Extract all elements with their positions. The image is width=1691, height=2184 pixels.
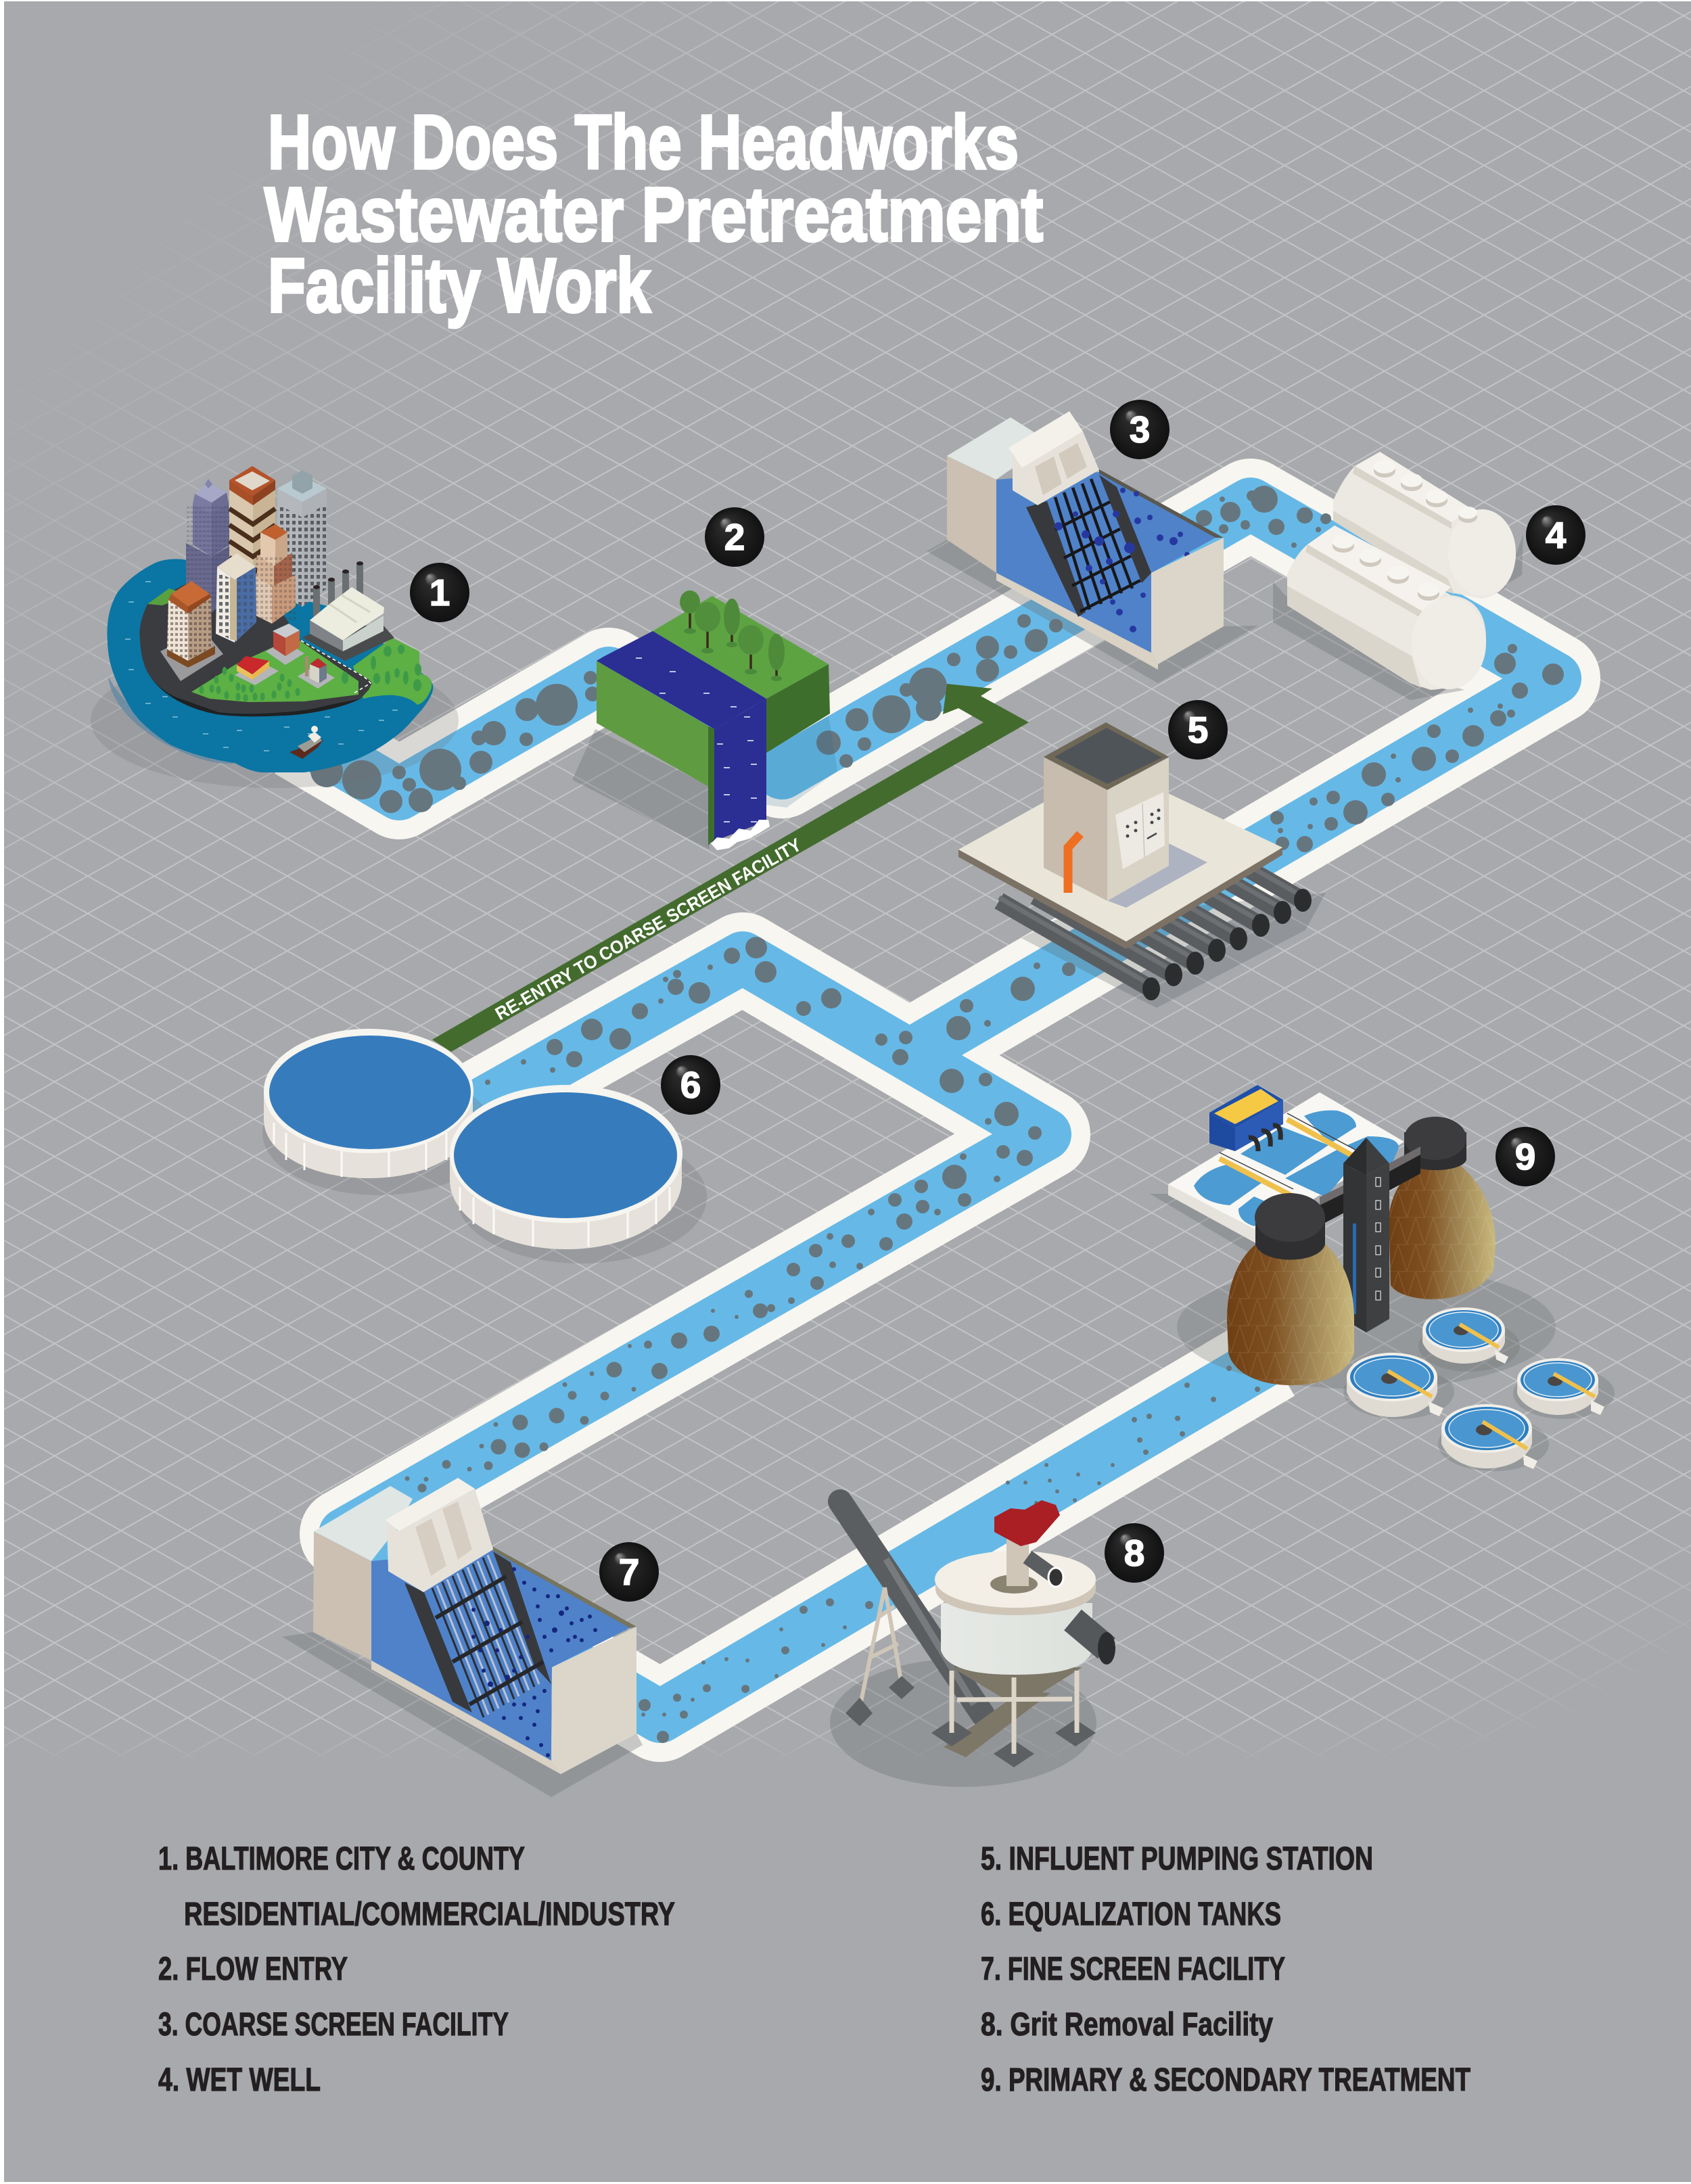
ground shadow bbox=[1177, 1265, 1556, 1389]
river surface bbox=[597, 631, 766, 729]
top-left land patch bbox=[147, 588, 189, 605]
right face bbox=[766, 664, 830, 753]
trees on the bank bbox=[680, 590, 785, 681]
lawn bbox=[191, 641, 358, 702]
right wall bbox=[1151, 538, 1224, 664]
catwalks bbox=[1320, 1146, 1420, 1226]
conveyor bbox=[840, 1502, 983, 1715]
hopper cone bbox=[952, 1667, 1082, 1701]
road bbox=[139, 575, 372, 714]
tank two rim bbox=[450, 1085, 682, 1223]
channel shadow bbox=[766, 716, 837, 808]
back digester dome bbox=[1389, 1117, 1496, 1299]
basin plate bbox=[1168, 1092, 1404, 1232]
purple tower bbox=[186, 479, 235, 612]
striped tower bbox=[229, 466, 275, 582]
legend: right column: 5. INFLUENT PUMPING STATION bbox=[981, 1841, 1373, 1877]
number badge 4: 4 bbox=[1546, 514, 1567, 556]
screen bars bbox=[1055, 479, 1140, 611]
legend: left column: 3. COARSE SCREEN FACILITY bbox=[158, 2007, 509, 2043]
clarifier two bbox=[1343, 1353, 1454, 1419]
tank one shadow bbox=[262, 1071, 495, 1195]
number badge 6 bbox=[661, 1055, 720, 1115]
harbour water bbox=[107, 559, 433, 772]
tower left face bbox=[1044, 758, 1107, 901]
legend: left column: 2. FLOW ENTRY bbox=[158, 1951, 348, 1987]
platform edge bbox=[958, 847, 1282, 949]
tower roof bbox=[1044, 722, 1169, 790]
road dark lower edge bbox=[149, 674, 361, 716]
number badge 9: 9 bbox=[1515, 1136, 1535, 1178]
left wall bbox=[313, 1531, 371, 1660]
platform top bbox=[958, 766, 1282, 942]
front bottom ledge bbox=[371, 1660, 561, 1774]
panel: wet well tanks (4) bbox=[1273, 452, 1523, 700]
stem base ring bbox=[990, 1575, 1038, 1594]
panel: primary and secondary treatment (9) bbox=[1150, 1085, 1615, 1471]
number badge 5 bbox=[1168, 700, 1228, 760]
silo body bbox=[941, 1603, 1092, 1675]
foam bbox=[711, 820, 770, 850]
gate housing bbox=[386, 1478, 493, 1592]
tank two water bbox=[454, 1092, 677, 1218]
left wall bbox=[947, 456, 996, 573]
dashed road line bbox=[301, 641, 371, 693]
debris dots bbox=[471, 1567, 597, 1757]
yellow bridges bbox=[1220, 1113, 1356, 1196]
legend: left column: 4. WET WELL bbox=[158, 2062, 321, 2098]
front bottom ledge bbox=[996, 573, 1158, 670]
red valve bbox=[994, 1500, 1060, 1546]
pipe mouth bbox=[1048, 1568, 1063, 1587]
panel: coarse screen facility (3) bbox=[927, 411, 1258, 683]
number badge 7 bbox=[599, 1542, 659, 1602]
pipe openings bbox=[1142, 889, 1312, 1000]
basin plate edge bbox=[1168, 1184, 1261, 1246]
arrow: re-entry green return line bbox=[432, 684, 1029, 1052]
number badge 6: 6 bbox=[680, 1064, 701, 1106]
waterfall bbox=[708, 699, 766, 843]
ladder stand bbox=[846, 1587, 914, 1726]
tank two shadow bbox=[457, 1131, 707, 1263]
front tank bbox=[1287, 526, 1486, 690]
tank one rim bbox=[264, 1029, 473, 1153]
sludge particles in channel bbox=[310, 486, 1564, 1743]
tower right face bbox=[1107, 758, 1169, 901]
basins bbox=[1194, 1111, 1399, 1226]
orange pipe bbox=[1068, 834, 1080, 893]
panel: city (1) bbox=[91, 466, 459, 788]
screen frame bbox=[1026, 475, 1151, 617]
stem bbox=[1006, 1539, 1029, 1586]
brick tower bbox=[167, 581, 215, 668]
intake pipes bbox=[999, 847, 1303, 989]
back rim bbox=[1099, 469, 1224, 538]
number badge 9 bbox=[1496, 1127, 1555, 1186]
houses bbox=[235, 624, 335, 689]
discharge pipe bbox=[1073, 1620, 1107, 1648]
grey tower bbox=[277, 470, 327, 607]
legend: left column: 1. BALTIMORE CITY & COUNTY bbox=[158, 1841, 525, 1877]
tank one water bbox=[269, 1036, 471, 1149]
number badge 2 bbox=[705, 507, 764, 567]
orange tower bbox=[256, 524, 296, 624]
front digester dome bbox=[1227, 1193, 1354, 1385]
clarifier four bbox=[1438, 1404, 1549, 1471]
floor shadow bbox=[1108, 843, 1207, 908]
control panel bbox=[1115, 792, 1165, 869]
top slab bbox=[314, 1486, 413, 1561]
water ripples bbox=[125, 582, 398, 751]
clarifier three bbox=[1513, 1358, 1615, 1419]
legend: left column bbox=[158, 1841, 675, 2098]
water under-layer bbox=[108, 676, 237, 764]
legend: left column: RESIDENTIAL/COMMERCIAL/INDUSTRY bbox=[184, 1897, 675, 1932]
silo lip bbox=[935, 1579, 1096, 1615]
ground shadow bbox=[572, 729, 710, 850]
conveyor highlight bbox=[886, 1559, 974, 1704]
ground shadow bbox=[830, 1658, 1096, 1787]
factory pad bbox=[302, 626, 394, 661]
legend: right column: 8. Grit Removal Facility bbox=[981, 2007, 1273, 2043]
number badge 3 bbox=[1110, 400, 1169, 459]
title: How Does The Headworks bbox=[268, 99, 1019, 185]
tank one wall bbox=[264, 1092, 473, 1178]
number badge 8 bbox=[1105, 1523, 1164, 1583]
title bbox=[264, 99, 1043, 328]
paved pad bbox=[160, 629, 223, 681]
cross bars bbox=[436, 1577, 543, 1704]
basin plate shadow bbox=[1150, 1194, 1272, 1258]
legend: right column bbox=[981, 1841, 1470, 2098]
trees bbox=[199, 645, 421, 702]
blue pump house bbox=[1209, 1085, 1283, 1151]
number badge 5: 5 bbox=[1188, 709, 1208, 751]
legend: right column: 7. FINE SCREEN FACILITY bbox=[981, 1951, 1285, 1987]
top face bbox=[653, 596, 829, 699]
number badge 2: 2 bbox=[724, 516, 745, 558]
tank two wall bbox=[450, 1155, 682, 1249]
re-entry label: RE-ENTRY TO COARSE SCREEN FACILITY bbox=[492, 835, 805, 1024]
silo legs bbox=[952, 1671, 1077, 1754]
debris dots bbox=[1055, 488, 1190, 632]
discharge mouth bbox=[1098, 1632, 1115, 1665]
right wall bbox=[551, 1627, 636, 1774]
number badge 8: 8 bbox=[1124, 1532, 1144, 1574]
gate housing bbox=[1009, 411, 1099, 505]
legend: right column: 9. PRIMARY & SECONDARY TREATMENT bbox=[981, 2062, 1470, 2098]
back rim bbox=[493, 1547, 636, 1628]
chimneys bbox=[313, 561, 363, 619]
white and blue tower bbox=[216, 553, 256, 643]
tugboat bbox=[289, 726, 323, 759]
number badge 1: 1 bbox=[430, 572, 450, 613]
factory bbox=[310, 587, 384, 651]
title: Wastewater Pretreatment bbox=[264, 172, 1043, 257]
top slab bbox=[947, 417, 1049, 480]
number badge 4 bbox=[1526, 505, 1585, 565]
screen frame bbox=[404, 1552, 551, 1713]
grid fade in lower right corner bbox=[0, 1488, 1691, 1806]
cutaway water bbox=[996, 472, 1215, 653]
panel: influent pumping station (5) bbox=[958, 722, 1326, 1008]
tank shadows bbox=[1273, 534, 1523, 700]
water ripples bbox=[636, 658, 757, 822]
number badge 1 bbox=[410, 563, 469, 622]
legend: right column: 6. EQUALIZATION TANKS bbox=[981, 1897, 1281, 1932]
stair tower bbox=[1343, 1138, 1389, 1332]
discharge chute bbox=[944, 1691, 1050, 1757]
island shadow bbox=[91, 653, 459, 788]
cutaway water bbox=[371, 1550, 630, 1761]
silo lid bbox=[935, 1551, 1096, 1608]
panel: grit removal facility (8) bbox=[830, 1500, 1115, 1787]
panel: flow entry waterfall (2) bbox=[572, 590, 837, 850]
number badge 7: 7 bbox=[619, 1551, 639, 1593]
title: Facility Work bbox=[268, 243, 651, 328]
small side pipe bbox=[1027, 1557, 1056, 1577]
panel: equalization tanks (6) bbox=[262, 1029, 707, 1263]
right land bbox=[353, 638, 432, 705]
ground shadow bbox=[282, 1632, 643, 1797]
number badge 3: 3 bbox=[1130, 409, 1150, 450]
front face bbox=[597, 661, 714, 789]
pipe highlights bbox=[999, 844, 1299, 983]
back tank bbox=[1333, 452, 1516, 599]
fine bars bbox=[432, 1555, 539, 1717]
ground shadow bbox=[927, 540, 1258, 683]
clarifier one bbox=[1418, 1307, 1520, 1372]
channel and ground shadow bbox=[1021, 893, 1326, 1008]
panel: fine screen facility (7) bbox=[282, 1478, 643, 1797]
water channel network bbox=[298, 504, 1555, 1717]
roof inset bbox=[1055, 728, 1162, 784]
foot pads bbox=[931, 1719, 1096, 1767]
